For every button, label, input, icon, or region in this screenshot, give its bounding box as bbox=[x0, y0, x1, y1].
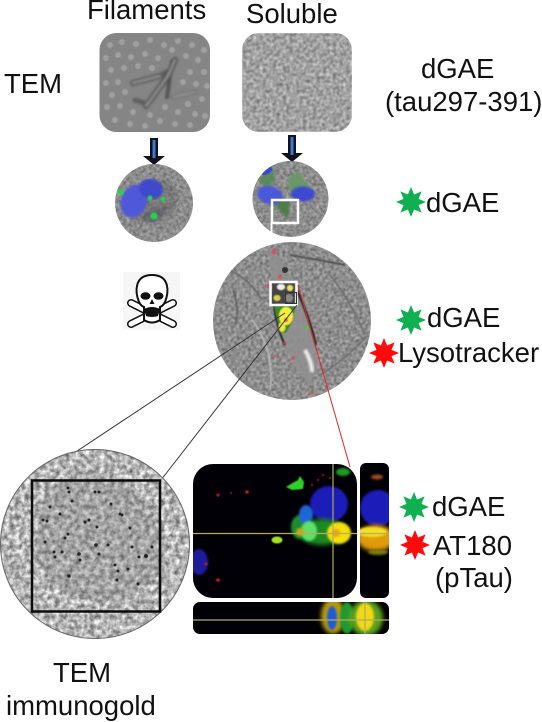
confocal: right yz panel bbox=[360, 463, 389, 598]
label: dGAE, AT180 (pTau): AT180 bbox=[433, 530, 512, 561]
icon: skull and crossbones bbox=[123, 272, 180, 330]
label: dGAE, AT180 (pTau) bbox=[399, 491, 513, 593]
micrograph: neuron with lysotracker bbox=[212, 240, 372, 402]
label: dGAE, AT180 (pTau): dGAE bbox=[432, 491, 505, 522]
connector: red zoom line bbox=[298, 285, 350, 467]
micrograph: soluble treated cell bbox=[252, 160, 330, 238]
micrograph: TEM immunogold bbox=[0, 449, 190, 639]
arrow: filaments to cell bbox=[143, 138, 165, 165]
label: dGAE and Lysotracker: Lysotracker bbox=[398, 337, 539, 368]
TEM image: filaments bbox=[99, 33, 211, 132]
label: TEM immunogold: immunogold bbox=[6, 690, 156, 721]
label: dGAE and Lysotracker bbox=[369, 302, 539, 368]
connector: black zoom lines bbox=[32, 305, 297, 481]
label: dGAE and Lysotracker: dGAE bbox=[427, 302, 500, 333]
confocal: main xy panel bbox=[190, 464, 357, 598]
crosshair bbox=[193, 464, 357, 598]
label: dGAE (tau297-391): dGAE bbox=[421, 53, 494, 84]
micrograph: filaments treated cell bbox=[114, 163, 194, 243]
white selection box bbox=[270, 282, 296, 305]
TEM image: soluble bbox=[242, 33, 352, 132]
fluorescent signal bbox=[272, 283, 309, 333]
arrow: soluble to cell bbox=[281, 135, 303, 162]
label: TEM: TEM bbox=[4, 68, 62, 99]
label: TEM immunogold: TEM bbox=[53, 657, 111, 688]
confocal: bottom xz panel bbox=[193, 602, 389, 634]
white selection box bbox=[272, 200, 298, 223]
label: dGAE with green star: dGAE bbox=[426, 187, 499, 218]
zoom square on immunogold bbox=[32, 480, 160, 612]
inner dark selection box bbox=[286, 292, 296, 304]
label: dGAE (tau297-391): (tau297-391) bbox=[385, 86, 542, 117]
filament bundle bbox=[133, 60, 195, 106]
connector: white line bbox=[270, 222, 272, 282]
label: dGAE (tau297-391) bbox=[385, 53, 542, 117]
label: TEM immunogold bbox=[6, 657, 156, 721]
label: dGAE, AT180 (pTau): (pTau) bbox=[435, 562, 513, 593]
